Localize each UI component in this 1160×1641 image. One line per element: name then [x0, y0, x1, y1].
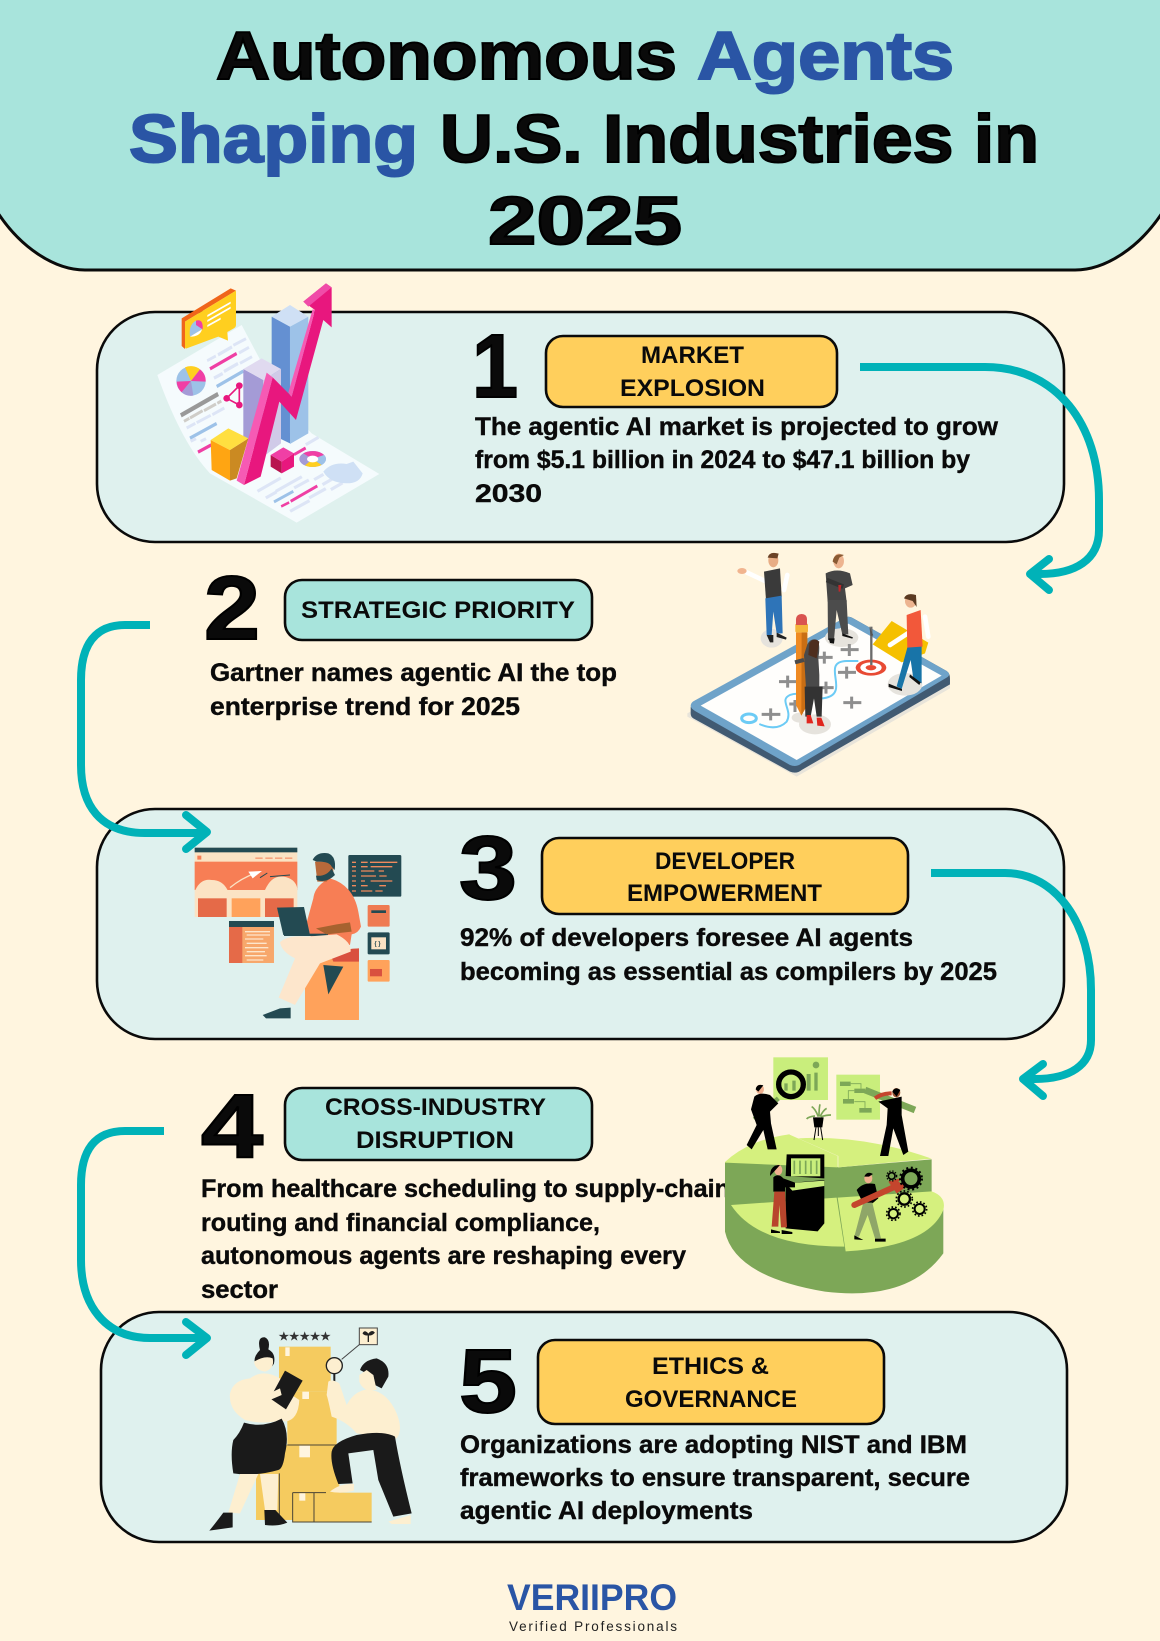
icon: green pie platform team illustration — [725, 1057, 944, 1293]
text: ethics and governance: Organizations are adopting NIST and IBM — [460, 1431, 967, 1459]
title: Shaping — [129, 101, 418, 177]
badge: cross-industry disruption — [285, 1088, 592, 1160]
icon: developer at laptop illustration — [195, 848, 401, 1020]
flow sheet — [836, 1075, 880, 1120]
arrow: panel 1 to 2 — [860, 367, 1099, 590]
badge: ethics and governance — [538, 1340, 884, 1424]
badge: cross-industry disruption: DISRUPTION — [356, 1127, 514, 1154]
text: ethics and governance: frameworks to ensure transparent, secure — [460, 1464, 970, 1492]
side cards — [368, 905, 390, 982]
panel: market explosion — [97, 312, 1064, 542]
text: market explosion — [475, 413, 999, 508]
lavender bar — [243, 358, 281, 457]
target — [856, 660, 886, 676]
text: cross-industry disruption: sector — [201, 1276, 278, 1304]
badge: developer empowerment: EMPOWERMENT — [627, 880, 822, 907]
title: 2025 — [488, 183, 682, 259]
gears — [887, 1168, 927, 1220]
text: ethics and governance: agentic AI deployments — [460, 1497, 753, 1525]
title — [129, 18, 1039, 259]
magnifier — [326, 1358, 342, 1382]
number 1: 1 — [472, 317, 518, 417]
text: developer empowerment — [460, 924, 997, 986]
person: man pointing — [737, 553, 787, 642]
arrow: panel 4 to 5 — [81, 1131, 207, 1355]
badge: market explosion: MARKET — [641, 342, 744, 369]
text: cross-industry disruption: autonomous agents are reshaping every — [201, 1242, 686, 1270]
number 4: 4 — [201, 1077, 263, 1177]
text: ethics and governance — [460, 1431, 970, 1525]
donut — [299, 451, 326, 467]
person: woman — [795, 639, 825, 726]
stars: ★★★★★ — [279, 1331, 331, 1343]
number 3: 3 — [459, 819, 517, 919]
person: wrench — [854, 1173, 907, 1242]
trousers — [279, 934, 351, 1005]
text: strategic priority — [210, 659, 617, 721]
plus marks — [762, 644, 861, 720]
control console — [786, 1154, 824, 1231]
person: magnifier — [747, 1072, 803, 1149]
badge: cross-industry disruption: CROSS-INDUSTRY — [325, 1094, 546, 1121]
number 2: 2 — [204, 559, 260, 659]
text: market explosion: The agentic AI market is projected to grow — [475, 413, 999, 441]
badge: market explosion — [546, 336, 837, 407]
title: Agents — [697, 18, 954, 94]
icon: growth chart illustration — [157, 283, 379, 523]
code panel — [348, 855, 401, 897]
pie chart — [176, 366, 206, 396]
stacked boxes — [256, 1347, 372, 1522]
icon: strategy tablet team illustration — [687, 553, 950, 777]
person: woman at console — [770, 1165, 795, 1234]
text: developer empowerment: becoming as essential as compilers by 2025 — [460, 958, 997, 986]
logo: VeriiPro — [507, 1577, 677, 1634]
text: market explosion: from $5.1 billion in 2024 to $47.1 billion by — [475, 446, 970, 474]
badge: ethics and governance: GOVERNANCE — [625, 1386, 797, 1413]
yellow block — [211, 428, 248, 481]
badge: developer empowerment — [542, 838, 908, 914]
header banner with title — [0, 0, 1160, 270]
panel: developer empowerment — [97, 809, 1064, 1039]
person: man walking — [889, 594, 928, 691]
head — [315, 862, 333, 882]
shirt — [306, 878, 361, 945]
text: market explosion: 2030 — [475, 480, 542, 508]
person: man thinking — [826, 554, 853, 644]
badge: market explosion: EXPLOSION — [620, 375, 765, 402]
laptop — [277, 907, 310, 935]
badge: strategic priority: STRATEGIC PRIORITY — [301, 597, 575, 624]
title: U.S. Industries in — [440, 101, 1039, 177]
arrow: panel 3 to 4 — [931, 873, 1091, 1096]
book — [873, 621, 928, 662]
text: cross-industry disruption — [201, 1175, 730, 1304]
pink cube — [271, 447, 294, 473]
arrow: panel 2 to 3 — [81, 625, 207, 849]
pink arrow — [237, 283, 332, 485]
chart sheet — [773, 1057, 828, 1100]
badge: ethics and governance: ETHICS & — [652, 1353, 769, 1380]
logo: VeriiPro: Verified Professionals — [509, 1619, 677, 1634]
person: woman with clipboard — [209, 1337, 303, 1531]
badge: strategic priority — [285, 580, 592, 640]
sprout tag — [342, 1328, 377, 1359]
text: strategic priority: enterprise trend for 2025 — [210, 693, 520, 721]
person: man with magnifier — [327, 1358, 412, 1524]
side cards: { } — [374, 942, 381, 948]
badge: developer empowerment: DEVELOPER — [655, 848, 795, 875]
plant — [807, 1104, 831, 1140]
pencil — [795, 614, 808, 716]
text: cross-industry disruption: routing and financial compliance, — [201, 1209, 600, 1237]
title: Autonomous — [216, 18, 677, 94]
icon: inspecting boxes illustration — [209, 1328, 412, 1531]
sheet panel — [229, 921, 274, 963]
text: strategic priority: Gartner names agentic AI the top — [210, 659, 617, 687]
blue bar — [272, 305, 308, 444]
text: cross-industry disruption: From healthcare scheduling to supply-chain — [201, 1175, 730, 1203]
logo: VeriiPro: VERIIPRO — [507, 1577, 677, 1618]
number 5: 5 — [459, 1332, 517, 1432]
person: pencil — [865, 1088, 915, 1156]
platform base — [725, 1134, 943, 1293]
web page mockup — [195, 848, 297, 917]
text: developer empowerment: 92% of developers foresee AI agents — [460, 924, 913, 952]
panel: ethics and governance — [101, 1312, 1067, 1542]
seat — [305, 948, 359, 1020]
speech bubble — [182, 288, 236, 349]
